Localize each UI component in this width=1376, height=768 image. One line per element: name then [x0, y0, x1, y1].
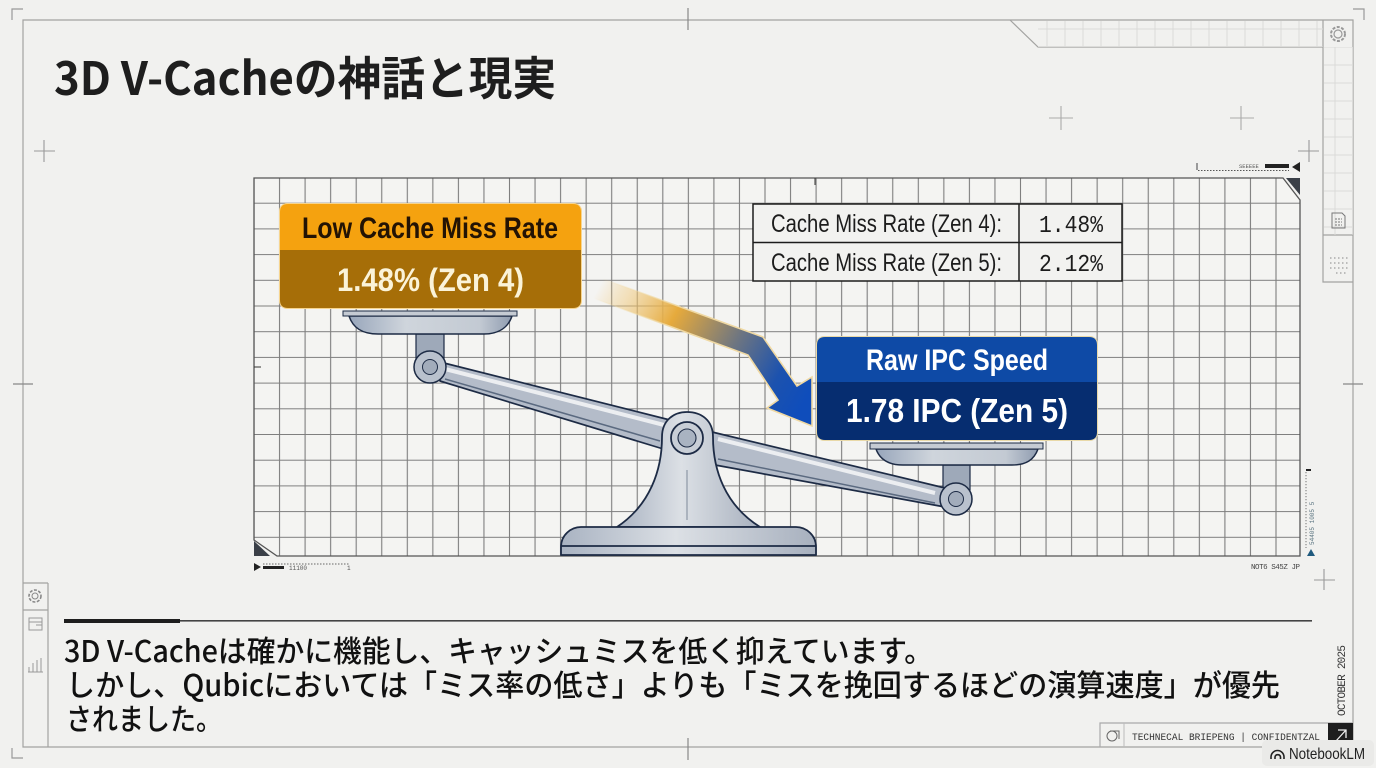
icon: dotted matrix	[1330, 258, 1348, 273]
beam	[440, 362, 945, 507]
balance scale	[343, 311, 1043, 555]
right pan	[870, 443, 1043, 490]
ruler mark: chart bottom left: 11100	[289, 565, 307, 572]
title: 3D V-Cacheの神話と現実	[54, 43, 556, 109]
ruler mark: chart top right: SEEEEE	[1239, 163, 1260, 170]
right pivot	[940, 483, 972, 515]
icon: bar chart	[28, 658, 43, 672]
footer tag: TECHNECAL BRIEPENG | CONFIDENTZAL	[1132, 732, 1320, 744]
table: cache miss rate	[753, 204, 1122, 281]
icon: gear bottom left	[29, 590, 41, 602]
chart grid panel	[254, 178, 1300, 556]
frame ruler grid: top right	[1038, 21, 1323, 47]
card: raw IPC speed: Raw IPC Speed	[866, 344, 1048, 377]
ruler mark: chart bottom left	[254, 563, 351, 572]
card: low cache miss rate: 1.48% (Zen 4)	[337, 262, 524, 298]
crosshair marks	[34, 106, 1335, 590]
ruler mark: chart bottom right	[1251, 470, 1316, 572]
table: cache miss rate: 2.12%	[1039, 252, 1104, 279]
table: cache miss rate: Cache Miss Rate (Zen 4):	[771, 210, 1002, 238]
card: raw IPC speed: 1.78 IPC (Zen 5)	[846, 392, 1068, 429]
table: cache miss rate: 1.48%	[1039, 213, 1104, 240]
card: raw IPC speed	[816, 336, 1098, 441]
ruler mark: chart top right	[1197, 162, 1300, 172]
card: low cache miss rate	[279, 203, 582, 309]
frame ruler grid: right column	[1324, 47, 1353, 235]
left pan	[343, 311, 517, 360]
summary text: 3D V-Cacheは確かに機能し、キャッシュミスを低く抑えています。	[64, 627, 933, 671]
summary text: しかし、Qubicにおいては「ミス率の低さ」よりも「ミスを挽回するほどの演算速度」が優先	[66, 661, 1280, 705]
arrow: orange to blue	[590, 277, 812, 426]
left pivot	[414, 351, 446, 383]
ruler mark: chart bottom right: NOT6 S45Z JP	[1251, 564, 1300, 572]
ruler mark: chart bottom right: 54405 1005 5	[1309, 501, 1316, 545]
card: low cache miss rate: Low Cache Miss Rate	[302, 212, 558, 245]
footer tag	[1100, 723, 1353, 747]
divider rule	[64, 619, 1312, 623]
fulcrum stand	[561, 412, 816, 555]
icon: folder	[29, 618, 42, 630]
summary text: されました。	[66, 695, 222, 739]
table: cache miss rate: Cache Miss Rate (Zen 5):	[771, 249, 1002, 277]
summary text	[64, 627, 1280, 739]
NotebookLM badge	[1262, 740, 1374, 766]
icon: gear top right	[1331, 27, 1345, 41]
vertical date label: OCTOBER 2025	[1337, 645, 1349, 716]
icon: document	[1332, 213, 1345, 228]
ruler mark: chart bottom left: 1	[347, 565, 351, 572]
